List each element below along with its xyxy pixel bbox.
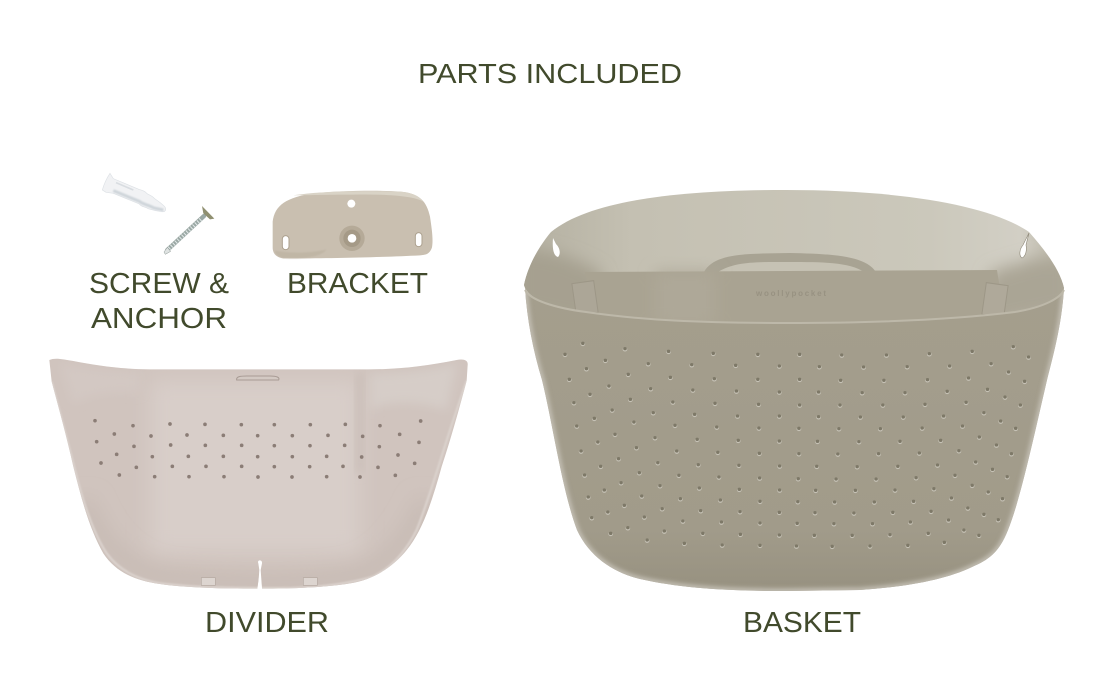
keyhole left [553,238,560,257]
title: PARTS INCLUDED [418,58,682,89]
infographic: parts included [49,64,1065,632]
label: screw and anchor: ANCHOR [91,303,227,335]
part: divider [49,359,468,589]
part: anchor [102,173,166,212]
part: basket [515,190,1072,591]
basket front body [525,288,1064,591]
label: divider: DIVIDER [205,607,329,639]
label: screw and anchor: SCREW & [89,268,229,300]
part: bracket [273,191,433,258]
basket perforation dots [565,343,1029,547]
part: screw [164,206,214,254]
keyhole right [1020,233,1029,258]
label: screw and anchor [89,268,229,335]
divider perforation dots [95,421,421,477]
label: bracket: BRACKET [287,268,428,300]
brand mark: woollypocket [755,289,826,298]
label: basket: BASKET [743,607,861,639]
